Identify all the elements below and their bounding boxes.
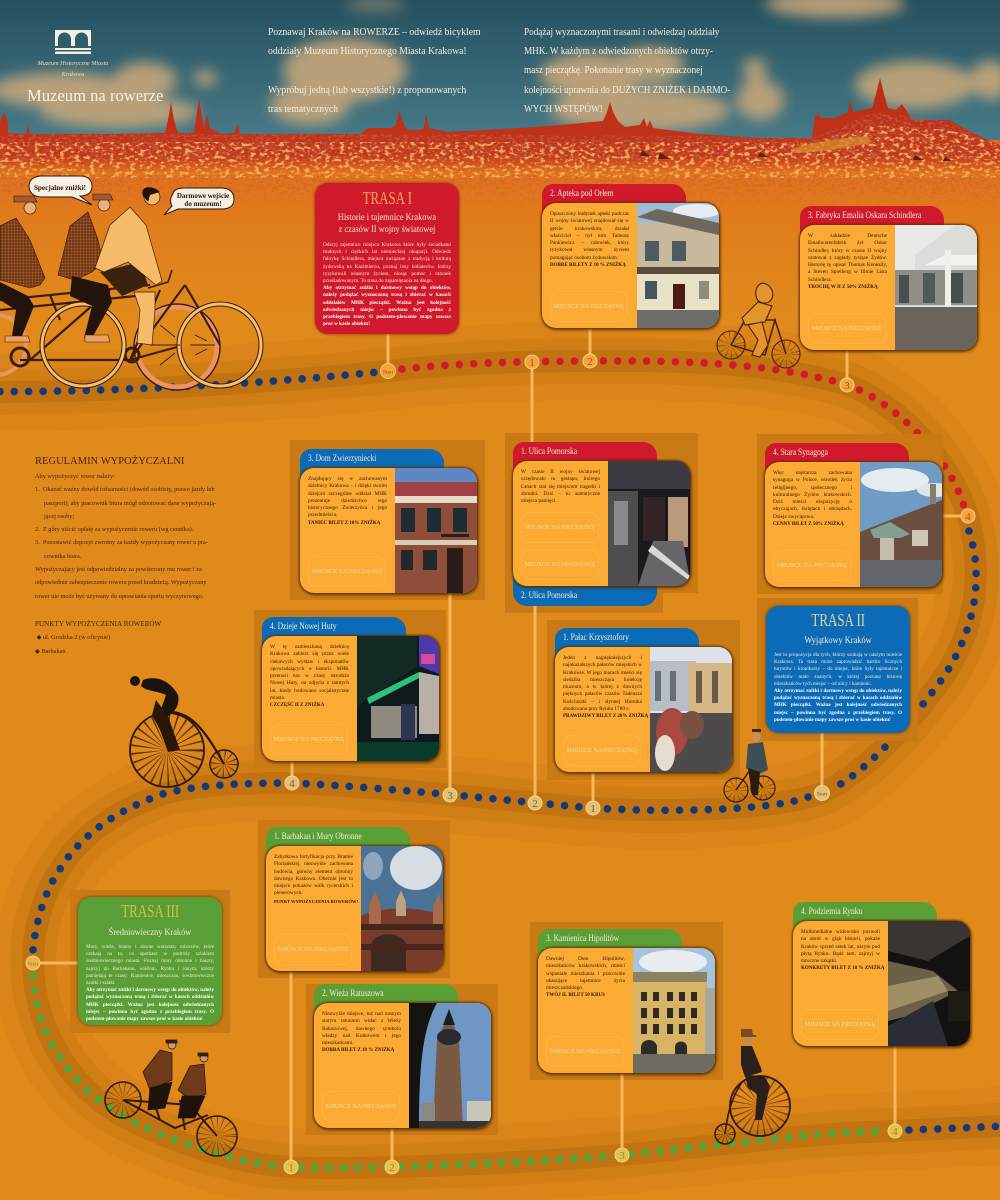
card body <box>262 636 439 761</box>
stamp area: MIEJSCE NA PIECZĄTKĘ <box>812 325 882 332</box>
tab title: route II <box>513 566 657 606</box>
text: Trasa III description: Aby otrzymać zniżki i darmowy wstęp do obiektów, należy podążać wyznaczoną trasą i zbierać w kasach oddziałów MHK pieczątki. Ważna jest kolejność odwiedzanych miejsc – powinna być zgodna z przebiegiem trasy. O podstem-plowanie mapy zawsze proś w kasie obiektu! <box>86 987 214 1022</box>
card: Kamienica Hipolitów <box>538 929 715 1073</box>
text: Trasa I description <box>323 242 452 327</box>
photo: Schindler factory <box>895 225 977 350</box>
illustration: penny-farthing rider in black <box>129 676 239 788</box>
intro text column 1: tras tematycznych <box>268 104 338 115</box>
tab title <box>266 827 410 867</box>
text: rules list: rower nie może być używany do uprawiania sportu wyczynowego. <box>35 593 203 600</box>
stamp area <box>801 1009 879 1040</box>
panel: rental rules <box>35 455 216 655</box>
heading: TRASA III: TRASA III <box>121 901 179 921</box>
card: Stara Synagoga <box>762 443 946 591</box>
tab title <box>793 902 937 942</box>
marker: 4 green <box>888 1124 902 1138</box>
stamp area <box>808 313 886 344</box>
marker: 4 red: 4 <box>965 511 971 523</box>
card body <box>513 461 690 586</box>
card body <box>542 203 719 328</box>
photo: exhibition interior <box>608 461 690 586</box>
card: Fabryka Emalia <box>798 206 980 354</box>
photo: Barbican <box>361 846 443 971</box>
marker: start trasa I <box>380 364 396 378</box>
illustration: child on bicycle <box>716 282 800 368</box>
card text: TWÓJ II. BILET 50 KRUS <box>546 993 605 998</box>
tab title: 4. Stara Synagoga <box>773 447 828 458</box>
marker: 1 red: 1 <box>529 357 535 369</box>
marker: 4 blue: 4 <box>289 778 295 790</box>
card text: Więc najstarsza zachowana synagoga w Polsce, ośrodek życia religijnego, społecznego i kulturalnego Żydów krakowskich. Dziś mieści ekspozycję o obyczajach, świętach i obrzędach. Dzieje zwycięstwa. <box>773 470 852 520</box>
heading: TRASA II: TRASA II <box>811 610 865 630</box>
card text: Jeden z najpiękniejszych i najokazalszych pałaców miejskich w Krakowie. W jego murach mieści się siedziba mieszcząca kolekcję muzeum, a w której z dawnych pięknych pałaców czasów Tadeusza Kościuszki – i słynnej Hutnika zbudowana przy Rynku 1789 r. <box>563 655 642 712</box>
text: rules list: 2. Z góry uiścić opłatę za wypożyczenie roweru (wg cennika). <box>35 526 193 533</box>
text: rules list: odpowiednie zabezpieczenie roweru przed kradzieżą. Wypożyczany <box>35 579 207 586</box>
photo: pharmacy building <box>637 203 719 328</box>
tab title: 3. Dom Zwierzyniecki <box>308 453 376 464</box>
stamp area <box>274 934 352 965</box>
subheading: Trasa II: Wyjątkowy Kraków <box>804 635 872 646</box>
stamp area 1 <box>521 512 599 543</box>
tab title: route II: 2. Ulica Pomorska <box>521 590 577 601</box>
card text: W tę zamieszkaną dzielnicę Krakowa zabierz się przez wiele ciekawych wystaw i eksponatów opowiadających o historii. MHK przenosi nas w czasy narodzin Nowej Huty, na zdjęcia z tamtych lat, kiedy budowano socjalistyczne miasto. <box>270 644 349 701</box>
marker: 4 red <box>961 509 975 523</box>
card body <box>314 1003 491 1128</box>
photo: horse carriages on the square <box>650 647 732 772</box>
intro text column 2: MHK. W każdym z odwiedzonych obiektów otrzy- <box>524 46 713 57</box>
marker: 2 red: 2 <box>587 356 593 368</box>
photo: old synagogue <box>860 462 942 587</box>
stamp area <box>322 1091 400 1122</box>
tab title: 2. Wieża Ratuszowa <box>322 988 384 999</box>
card body <box>266 846 443 971</box>
marker: 4 green: 4 <box>892 1126 898 1138</box>
text: rental points <box>35 620 162 655</box>
intro text column 2: WYCH WSTĘPÓW! <box>524 104 603 115</box>
card text: DOBRA BILET Z 10 % ZNIŻKĄ <box>322 1048 394 1053</box>
photo: brick house <box>395 468 477 593</box>
marker: 3 red: 3 <box>844 380 850 392</box>
illustration: cyclist with hat <box>723 729 776 803</box>
stamp area: MIEJSCE NA PIECZĄTKĘ <box>326 1103 396 1110</box>
card text: Dawniej Dom Hipolitów, mieszkańców krakowskich, mieści wspaniałe mieszkania i pracownie ukazujące tajemnice życia mieszczańskiego. <box>546 956 625 991</box>
card: Dom Zwierzyniecki <box>298 449 480 598</box>
panel: TRASA I <box>315 183 459 334</box>
card text: PUNKT WYPOŻYCZENIA ROWERÓW! <box>274 899 358 904</box>
stamp area <box>773 550 851 581</box>
marker: 4 blue <box>285 776 299 790</box>
tab title <box>765 443 909 483</box>
tab title <box>300 449 444 489</box>
intro text column 2: Podążaj wyznaczonymi trasami i odwiedzaj oddziały <box>524 27 719 38</box>
tab title <box>314 984 458 1024</box>
subheading: Trasa I: z czasów II wojny światowej <box>339 224 435 234</box>
heading: TRASA I: TRASA I <box>362 188 412 208</box>
stamp area <box>308 556 386 587</box>
stamp area <box>270 724 348 755</box>
intro text column 1: Wypróbuj jedną (lub wszystkie!) z proponowanych <box>268 85 466 96</box>
marker: 3 blue: 3 <box>447 790 453 802</box>
tab title: 2. Apteka pod Orłem <box>550 188 614 199</box>
card text: PRAWDZIWY BILET Z 20% ZNIŻKĄ <box>563 714 648 719</box>
card body <box>765 462 942 587</box>
speech bubble: Darmowe wejście do muzeum: do muzeum! <box>184 200 222 208</box>
marker: 2 red <box>583 354 597 368</box>
card: Ulica Pomorska (two tabs) <box>510 442 694 606</box>
text: rules list: Aby wypożyczyć rower należy: <box>35 473 115 480</box>
card text: W zakładzie Deutsche Emailwarenfabrik żył Oskar Schindler, który w czasie II wojny uratował z zagłady tysiące Żydów. Historię tę opisał Thomas Keneally, a Steven Spielberg w filmie Lista Schindlera. <box>808 233 887 283</box>
card: Wieża Ratuszowa <box>314 984 491 1128</box>
marker: 2 green: 2 <box>389 1162 395 1174</box>
card body <box>793 921 970 1046</box>
marker: start trasa II <box>814 786 830 800</box>
illustration: penny-farthing with top-hat rider <box>710 1025 795 1150</box>
icon: museum logo: Muzeum Historyczne Miasta <box>38 60 108 67</box>
card text: Opuszczony budynek apteki podczas II wojny światowej znajdował się w getcie krakowskim, działał właściciel – był nim Tadeusz Pankiewicz – człowiek, który ryzykował własnym życiem pomagając osobom żydowskim. <box>550 211 629 261</box>
stamp area: MIEJSCE NA PIECZĄTKĘ <box>550 1048 620 1055</box>
text: rental points: ◆ Barbakan <box>35 648 66 655</box>
tab title: route I: 1. Ulica Pomorska <box>521 446 577 457</box>
marker: 3 red <box>840 378 854 392</box>
stamp area 2 <box>521 549 599 580</box>
text: rules list: jącej osoby; <box>44 513 74 520</box>
card text: CZCZĘŚĆ II Z ZNIŻKA <box>270 703 324 708</box>
intro text column 1: Poznawaj Kraków na ROWERZE – odwiedź bicyklem <box>268 27 481 38</box>
text: Trasa II description: Jest to propozycja dla tych, którzy szukają w naszym mieście Krakowa. Ta trasa może zaprowadzić bardzo licznych turystów i kronikarzy – do miejsc, które były tajemnicze i obiektów mało znanych, w której poznasz historię mieszkańców tych miejsc – od ulicy i kamienic. <box>774 652 902 687</box>
marker: 3 green <box>615 1148 629 1162</box>
icon: museum logo: Krakowa <box>62 70 84 78</box>
marker: 1 red <box>525 355 539 369</box>
stamp area <box>550 291 628 322</box>
tab title: 1. Barbakan i Mury Obronne <box>274 831 362 842</box>
text: rental points: PUNKTY WYPOŻYCZENIA ROWERÓW <box>35 620 161 628</box>
photo: underground exhibition <box>888 921 970 1046</box>
card body <box>800 225 977 350</box>
card: Barbakan <box>264 827 446 976</box>
card text: Zabytkowa fortyfikacja przy Bramie Floriańskiej, niezwykle zachowana budowla, główny element obronny dawnego Krakowa. Obecnie jest to miejsce pokazów walk rycerskich i plenerowych. <box>274 854 353 896</box>
tab title <box>538 929 682 969</box>
text: rules list: 3. Pozostawić depozyt zwrotny za każdy wypożyczany rower u pra- <box>35 539 208 546</box>
stamp area: MIEJSCE NA PIECZĄTKĘ <box>274 736 344 743</box>
speech bubble: Specjalne zniżki: Specjalne zniżki! <box>34 184 86 192</box>
card body <box>555 647 732 772</box>
card text: CENNY BILET Z 50% ZNIŻKĄ <box>773 522 844 527</box>
illustration: three cyclists with speech bubbles <box>0 176 264 391</box>
intro text column 2 <box>524 27 730 115</box>
stamp area: MIEJSCE NA PIECZĄTKĘ <box>554 303 624 310</box>
photo: town hall tower <box>409 1003 491 1128</box>
text: Trasa II description: Aby otrzymać zniżki i darmowy wstęp do obiektów, należy podążać wyznaczoną trasą i zbierać w kasach oddziałów MHK pieczątki. Ważna jest kolejność odwiedzanych miejsc – powinna być zgodna z przebiegiem trasy. O podstem-plowanie mapy zawsze proś w kasie obiektu! <box>774 688 902 723</box>
heading: rental rules: REGULAMIN WYPOŻYCZALNI <box>35 456 184 467</box>
stamp area: MIEJSCE NA PIECZĄTKĘ <box>278 946 348 953</box>
speech bubble: Darmowe wejście do muzeum <box>164 188 234 215</box>
marker: 2 blue: 2 <box>532 798 538 810</box>
icon: museum logo <box>38 30 108 78</box>
card: Apteka pod Orłem <box>540 184 722 332</box>
marker: 1 blue <box>586 801 600 815</box>
photo: yellow tenement <box>633 948 715 1073</box>
tab title: 1. Pałac Krzysztofory <box>563 632 629 643</box>
intro text column 2: masz pieczątkę. Pokonanie trasy w wyznaczonej <box>524 65 703 76</box>
card text: Znajdujący się w zachowanym dzielnicy Krakowa – i dzięki swoim dziejom szczególne oddział MHK prezentuje dziedzictwo tego historycznego Zwierzyńca i jego przedmieścia. <box>308 476 387 518</box>
text: rules list <box>35 473 216 600</box>
marker: start trasa III: Start <box>28 962 39 968</box>
text: Trasa III description <box>86 944 214 1022</box>
marker: start trasa II: Start <box>817 792 828 798</box>
stamp area 2: MIEJSCE NA PIECZĄTKĘ <box>525 561 595 568</box>
tab title <box>542 184 686 224</box>
stamp area: MIEJSCE NA PIECZĄTKĘ <box>312 568 382 575</box>
tab title <box>800 206 944 246</box>
intro text column 1 <box>268 27 481 115</box>
city panorama <box>0 78 1000 178</box>
subheading: Trasa I <box>338 212 436 234</box>
card text: KONKRETY BILET Z 10 % ZNIŻKĄ <box>801 966 884 971</box>
card text: TANIEC BILET Z 10% ZNIŻKĄ <box>308 521 380 526</box>
speech bubble: Darmowe wejście do muzeum: Darmowe wejście <box>177 192 229 200</box>
marker: 2 green <box>385 1160 399 1174</box>
card text: DOBRE BILETY Z 10 % ZNIŻKĄ <box>550 263 626 268</box>
marker: start trasa III <box>26 956 40 970</box>
stamp area: MIEJSCE NA PIECZĄTKĘ <box>567 747 637 754</box>
marker: 1 green: 1 <box>288 1162 294 1174</box>
marker: 3 green: 3 <box>619 1150 625 1162</box>
marker: start trasa I: Start <box>383 370 394 376</box>
speech bubble: Specjalne zniżki <box>29 176 92 205</box>
intro text column 2: kolejności uprawnia do DUŻYCH ZNIŻEK i DARMO- <box>524 85 730 96</box>
panel: TRASA II <box>766 606 910 733</box>
tab title <box>555 628 699 668</box>
subheading: Trasa I: Historie i tajemnice Krakowa <box>338 212 436 223</box>
route dots <box>0 361 1000 1168</box>
marker: 2 blue <box>528 796 542 810</box>
text: Trasa III description: Mury, wieże, bramy i dawne warsztaty mistrzów, które czekają na to, co spotkasz w podróży szlakiem średniowiecznego miasta. Poznaj mury obronne i baszty, zajrzyj do Barbakanu, wieżom, Rynku i innym, którzy pamiętają te czasy: Kamienice, mieszczan, średniowieczne zaułki i szlaki. <box>86 944 214 986</box>
stamp area <box>546 1036 624 1067</box>
card text: TROCHĘ W II Z 50% ZNIŻKĄ <box>808 285 878 290</box>
route ribbon <box>0 361 1000 1168</box>
card text: Niezwykle miejsce, tuż nad naszym starym ratuszem widać z Wieży Ratuszowej, dawnego symbolu władzy nad Krakowem i jego mieszkańcami. <box>322 1011 401 1046</box>
title: Muzeum na rowerze <box>27 86 163 105</box>
text: rules list: cownika biura. <box>44 553 81 560</box>
tab title: 3. Kamienica Hipolitów <box>546 933 619 944</box>
card body <box>538 948 715 1073</box>
tab title: route I <box>513 442 657 482</box>
stamp area: MIEJSCE NA PIECZĄTKĘ <box>805 1021 875 1028</box>
text: rules list: 1. Okazać ważny dowód tożsamości (dowód osobisty, prawo jazdy lub <box>35 486 215 493</box>
card body <box>300 468 477 593</box>
marker: 1 green <box>284 1160 298 1174</box>
card text: Multimedialne widowisko pozwoli na obrót w głąb historii, pokaże Kraków sprzed setek lat, ukryte pod płytą Rynku. Bądź tam, zajrzyj w mroczne zakątki. <box>801 929 880 964</box>
card: Podziemia Rynku <box>793 902 970 1046</box>
photo: neon museum at night <box>357 636 439 761</box>
tab title: 4. Podziemia Rynku <box>801 906 862 917</box>
stamp area 1: MIEJSCE NA PIECZĄTKĘ <box>525 524 595 531</box>
text: rules list: paszport), aby pracownik biura mógł odnotować dane wypożyczają- <box>44 500 216 507</box>
marker: 3 blue <box>443 788 457 802</box>
text: rental points: ◆ ul. Grodzka 2 (w oficynie) <box>37 634 110 641</box>
card: Pałac Krzysztofory <box>552 628 736 776</box>
subheading: Trasa III: Średniowieczny Kraków <box>109 927 191 938</box>
illustration: tandem bicycle riders <box>100 1035 240 1160</box>
tab title <box>262 617 406 657</box>
text: rules list: Wypożyczający jest odpowiedzialny za powierzony mu rower i za <box>35 566 202 573</box>
text: Trasa I description: Odkryj tajemnice miejsca Krakowa które były świadkami trudnych i ciężkich lat niemieckiej okupacji. Odwiedź fabrykę Schindlera, miejsca związane z tradycją i kulturą żydowską na Kazimierzu, poznaj losy bohaterów, którzy ryzykowali własnym życiem, niosąc pomoc i ratunek prześladowanym. To trasa do zapamiętania na długo. <box>323 242 451 284</box>
intro text column 1: oddziały Muzeum Historycznego Miasta Krakowa! <box>268 46 467 57</box>
marker: 1 blue: 1 <box>590 803 596 815</box>
tab title: 4. Dzieje Nowej Huty <box>270 621 337 632</box>
tab title: 3. Fabryka Emalia Oskara Schindlera <box>808 210 921 221</box>
card text: W czasie II wojny światowej urzędowało tu gestapo, którego Gmach stał się miejscem tragedii i zbrodni. Dziś – tu autentyczne miejsca pamięci. <box>521 469 600 504</box>
text: Trasa I description: Aby otrzymać zniżki i darmowy wstęp do obiektów, należy podążać wyznaczoną trasą i zbierać w kasach oddziałów MHK pieczątki. Ważna jest kolejność odwiedzanych miejsc – powinna być zgodna z przebiegiem trasy. O podstem-plowanie mapy zawsze proś w kasie obiektu! <box>323 285 451 327</box>
stamp area: MIEJSCE NA PIECZĄTKĘ <box>777 562 847 569</box>
panel: TRASA III <box>78 897 222 1025</box>
stamp area <box>563 735 641 766</box>
card: Dzieje Nowej Huty <box>260 617 442 766</box>
text: Trasa II description <box>774 652 902 723</box>
